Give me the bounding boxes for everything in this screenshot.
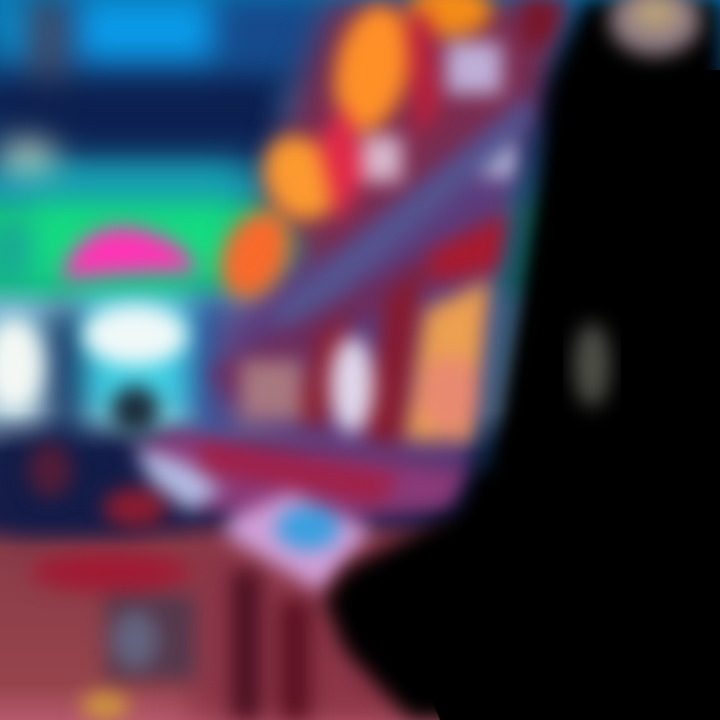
machines: cabinet base colour (210, 0, 570, 480)
background: left casino hall (0, 0, 405, 720)
red stripes (318, 105, 368, 225)
cyan-white glow (83, 305, 187, 365)
top right pale light (609, 0, 701, 56)
grey light on the silhouette (574, 323, 610, 407)
red pillars (365, 260, 425, 445)
pale panels (446, 42, 502, 94)
machines: details (0, 0, 565, 720)
foreground silhouette (325, 0, 720, 720)
pink shape (62, 227, 196, 280)
lower glowing screens (405, 280, 490, 440)
machine ledge (130, 430, 470, 520)
purple-blue diagonals (270, 95, 535, 340)
solid black interior of the silhouette (400, 70, 720, 720)
stools (30, 552, 190, 592)
orange lights (323, 0, 421, 138)
blue edge glow (476, 130, 540, 470)
